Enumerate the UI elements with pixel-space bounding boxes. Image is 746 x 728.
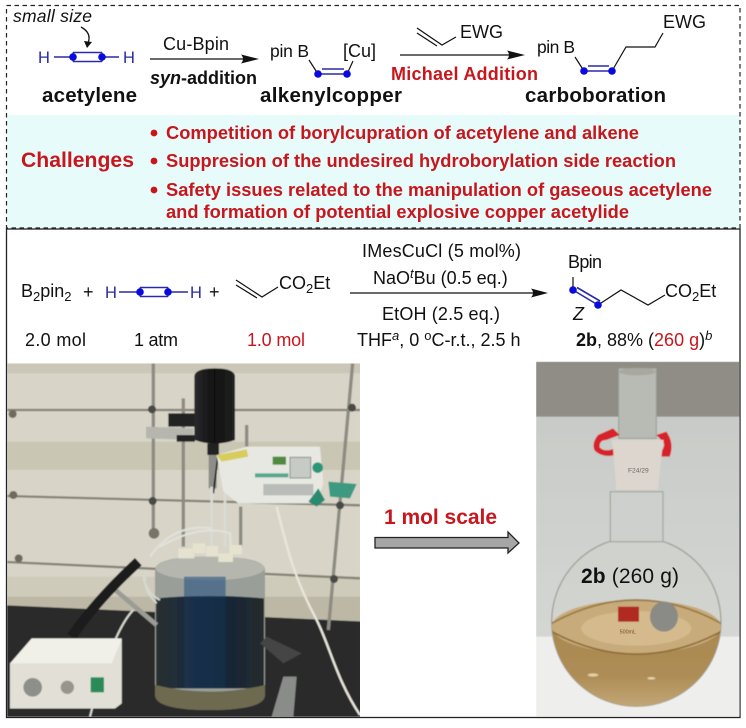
text: conditions below arrow: , 0 bbox=[399, 330, 424, 350]
molecule: acetylene reagent bbox=[105, 284, 202, 302]
molecule: product 2b: Et bbox=[699, 281, 716, 301]
label: product yield: 2b, 88% (260 g) bbox=[576, 330, 705, 350]
molecule: carboboration product bbox=[537, 12, 706, 75]
text: catalyst conditions above arrow: t bbox=[410, 266, 415, 281]
molecule: acetylene: H bbox=[38, 49, 50, 67]
text: conditions below arrow: a bbox=[392, 328, 399, 343]
text: catalyst conditions above arrow: Bu (0.5 eq.) bbox=[414, 268, 508, 288]
molecule: EWG alkene: EWG bbox=[460, 22, 503, 42]
text: catalyst conditions above arrow bbox=[362, 241, 521, 288]
molecule: ethyl acrylate bbox=[236, 273, 330, 298]
heading: Challenges: Challenges bbox=[21, 149, 134, 172]
molecule: alkenylcopper intermediate bbox=[270, 41, 376, 78]
molecule: ethyl acrylate: Et bbox=[313, 273, 330, 293]
equation: B2pin2 reagent: 2 bbox=[64, 289, 72, 304]
label: 1 atm: 1 atm bbox=[134, 330, 178, 350]
molecule: EWG alkene bbox=[417, 22, 503, 46]
molecule: product 2b: 2 bbox=[692, 289, 699, 304]
equation: first plus sign: + bbox=[83, 282, 94, 302]
equation: B2pin2 reagent: B bbox=[21, 281, 33, 301]
molecule: acetylene reagent: H bbox=[190, 284, 202, 302]
label: 2.0 mol: 2.0 mol bbox=[25, 330, 86, 350]
label: 1 mol scale: 1 mol scale bbox=[384, 506, 497, 529]
text: conditions below arrow: o bbox=[424, 328, 431, 343]
text: catalyst conditions above arrow: IMesCuCl (5 mol%) bbox=[362, 241, 521, 261]
label: flask product 2b: 2b (260 g) bbox=[581, 565, 679, 588]
arrow: Michael addition reaction arrow bbox=[400, 50, 525, 60]
list: challenges bullets: and formation of potential explosive copper acetylide bbox=[166, 201, 629, 222]
text: catalyst conditions above arrow: NaO bbox=[373, 268, 410, 288]
molecule: acetylene: H bbox=[123, 49, 135, 67]
molecule: acetylene reagent: H bbox=[105, 284, 117, 302]
text: conditions below arrow: C-r.t., 2.5 h bbox=[431, 330, 521, 350]
label: product yield: b bbox=[705, 328, 712, 343]
molecule: alkenylcopper intermediate: pin B bbox=[270, 41, 309, 61]
arrow: small size pointer bbox=[81, 27, 92, 48]
molecule: alkenylcopper intermediate: [Cu] bbox=[343, 41, 376, 61]
molecule: product 2b: Bpin bbox=[568, 252, 602, 272]
label: small size: small size bbox=[13, 6, 92, 26]
photo: reactor setup bbox=[0, 360, 367, 720]
label: Cu-Bpin: Cu-Bpin bbox=[163, 34, 229, 54]
panel: challenges background bbox=[7, 115, 740, 228]
molecule: carboboration product: pin B bbox=[537, 37, 575, 57]
label: syn-addition: syn-addition bbox=[150, 68, 257, 88]
label: alkenylcopper: alkenylcopper bbox=[260, 84, 402, 107]
list: challenges bullets: Competition of borylcupration of acetylene and alkene bbox=[166, 122, 639, 143]
label: acetylene: acetylene bbox=[42, 84, 137, 107]
molecule: ethyl acrylate: CO bbox=[279, 273, 306, 293]
label: carboboration: carboboration bbox=[525, 84, 666, 107]
photo: product flask: 500mL bbox=[620, 629, 636, 635]
photo: product flask: F24/29 bbox=[628, 468, 649, 475]
molecule: acetylene bbox=[38, 49, 135, 67]
molecule: product 2b: CO bbox=[665, 281, 692, 301]
molecule: product 2b bbox=[568, 252, 716, 324]
photo: product flask bbox=[536, 362, 740, 717]
arrow: syn-addition reaction arrow bbox=[150, 54, 259, 64]
equation: B2pin2 reagent: pin bbox=[40, 281, 64, 301]
list: challenges bullets: Suppresion of the undesired hydroborylation side reaction bbox=[166, 150, 676, 171]
text: conditions below arrow: EtOH (2.5 eq.) bbox=[382, 304, 500, 324]
list: challenges bullets bbox=[151, 122, 712, 222]
molecule: ethyl acrylate: 2 bbox=[306, 281, 313, 296]
text: conditions below arrow: THF bbox=[357, 330, 392, 350]
molecule: product 2b: Z bbox=[572, 304, 585, 324]
arrow: grey block arrow bbox=[375, 532, 519, 553]
label: Michael Addition: Michael Addition bbox=[391, 64, 538, 84]
panel: dashed concept box bbox=[6, 6, 740, 228]
label: 1.0 mol: 1.0 mol bbox=[247, 330, 305, 350]
equation: second plus sign: + bbox=[209, 282, 220, 302]
text: conditions below arrow bbox=[357, 304, 521, 350]
list: challenges bullets: Safety issues related to the manipulation of gaseous acetylene bbox=[166, 179, 712, 200]
panel: scale-up experiment frame bbox=[6, 229, 740, 718]
molecule: carboboration product: EWG bbox=[663, 12, 706, 32]
arrow: main reaction arrow bbox=[350, 288, 548, 298]
equation: B2pin2 reagent: 2 bbox=[33, 289, 40, 304]
